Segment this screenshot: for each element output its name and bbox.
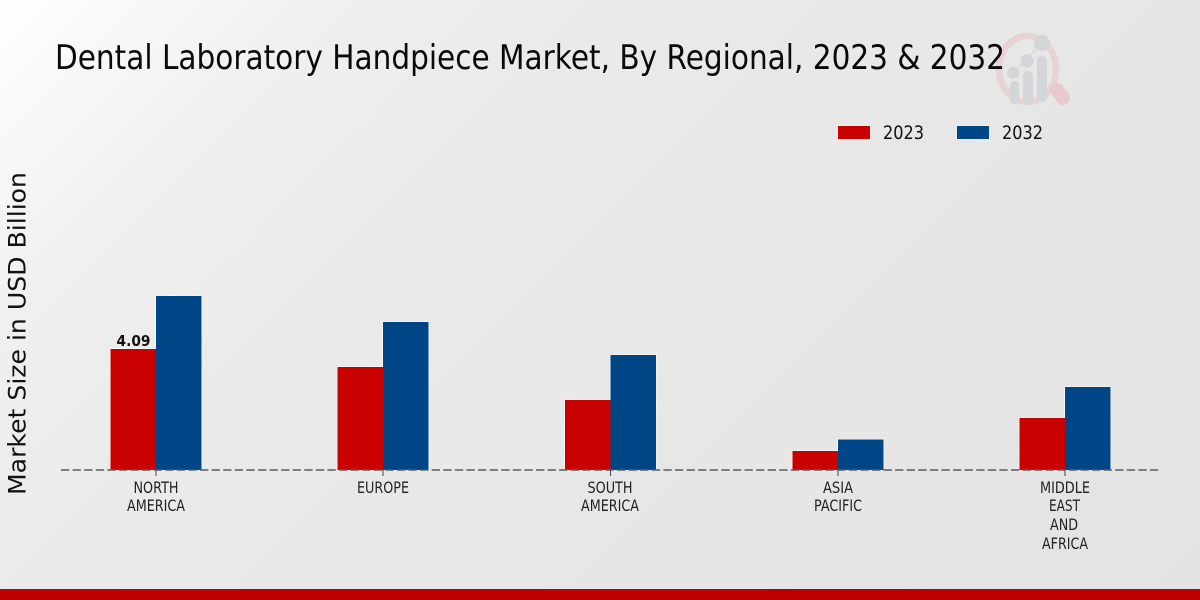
label: Europe: EUROPE [357, 478, 409, 497]
bar chart [61, 295, 1158, 470]
bars: Europe [338, 322, 428, 470]
label: Europe [357, 470, 409, 497]
label: Middle East and Africa: EAST [1049, 496, 1080, 515]
bars: Middle East and Africa [1020, 387, 1110, 470]
label: Middle East and Africa: MIDDLE [1040, 478, 1090, 497]
label: Asia Pacific [814, 470, 862, 515]
label: Middle East and Africa: AND [1050, 515, 1078, 534]
label: South America [581, 470, 639, 515]
label: North America [127, 470, 185, 515]
footer bar [0, 589, 1200, 600]
legend [838, 122, 1043, 144]
title: Dental Laboratory Handpiece Market, By Regional, 2023 & 2032 [55, 38, 1005, 78]
bars: South America [565, 355, 656, 470]
label: South America: AMERICA [581, 496, 639, 515]
legend item: 2032: 2032 [1002, 122, 1043, 144]
legend item: 2023: 2023 [883, 122, 924, 144]
label: South America: SOUTH [588, 478, 632, 497]
legend item: 2032 [956, 122, 1043, 144]
label: North America: AMERICA [127, 496, 185, 515]
label: Middle East and Africa: AFRICA [1042, 534, 1088, 553]
x-axis labels [127, 470, 1090, 553]
label: Asia Pacific: ASIA [823, 478, 853, 497]
legend item: 2023 [838, 122, 924, 144]
label: Middle East and Africa [1040, 470, 1090, 553]
bars: Asia Pacific [792, 440, 884, 470]
baseline [61, 469, 1158, 471]
y-axis title: Market Size in USD Billion [4, 172, 32, 495]
label: Asia Pacific: PACIFIC [814, 496, 862, 515]
bars: North America [110, 296, 202, 470]
value label: 4.09: 4.09 [116, 332, 150, 350]
icon: watermark logo [999, 35, 1063, 105]
label: North America: NORTH [134, 478, 178, 497]
